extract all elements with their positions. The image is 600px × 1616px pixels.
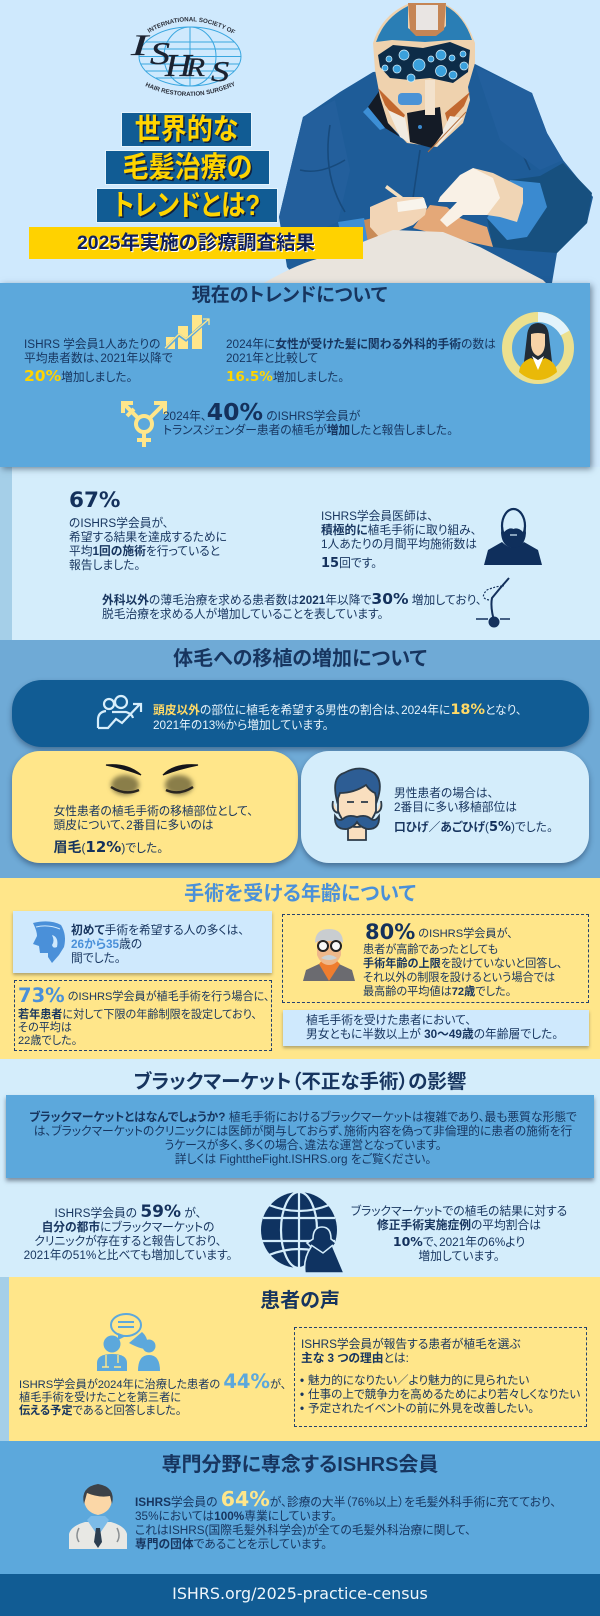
panel: patient voices [0,1277,600,1441]
text: patients per member: 20%増加しました。 [24,367,132,385]
text: beard 5 percent [394,786,553,835]
text: transgender patients: 2024年、40% のISHRS学会員が [163,398,360,426]
text: eyebrows 12 percent: 眉毛(12%)でした。 [54,838,163,856]
text: 80 percent: それ以外の制限を設けるという場合では [363,972,555,984]
text: female surgical procedures [226,337,496,385]
text: patients per member: ISHRS 学会員1人あたりの [24,338,160,351]
text: 80 percent [363,920,562,998]
text: 44 percent [19,1370,286,1417]
text: female surgical procedures: 16.5%増加しました。 [226,369,344,385]
subtitle band: 2025年実施の診療調査結果 [77,232,315,254]
title: line 1: 世界的な [135,112,238,146]
text: 26 to 35 years: 間でした。 [71,952,121,965]
list: three reasons: • [300,1374,304,1387]
text: 18 percent [153,702,522,732]
text: 26 to 35 years: 26から35歳の [71,938,142,951]
icon: closed eyes [106,764,198,798]
text: black market definition: うケースが多く、多くの場合、違法な運営となっています。 [165,1139,441,1152]
heading: dedicated ISHRS members: 専門分野に専念するISHRS会員 [162,1454,438,1476]
text: beard 5 percent: 男性患者の場合は、 [394,787,493,800]
text: 10 percent revision: 増加しています。 [418,1250,500,1263]
list: three reasons: 仕事の上で競争力を高めるためにより若々しくなりたい [308,1388,580,1401]
text: 67 percent one procedure: 希望する結果を達成するために [69,531,227,544]
text: 44 percent: 植毛手術を受けたことを第三者に [19,1392,181,1404]
text: 15 procedures per month: 積極的に植毛手術に取り組み、 [321,524,477,537]
text: black market definition: ブラックマーケットとはなんでしょうか? 植毛手術におけるブラックマーケットは複雑であり、最も悪質な形態で [29,1111,577,1124]
icon: hair follicle [476,577,510,628]
panel: dedicated members [0,1441,600,1574]
icon: woman in donut chart [502,312,574,384]
subtitle band [29,227,363,259]
text: 67 percent one procedure [69,488,227,572]
panel: body hair transplant [0,640,600,878]
callout: top three reasons [294,1327,587,1427]
text: 44 percent: ISHRS学会員が2024年に治療した患者の 44%が、 [19,1370,286,1393]
logo: ISHRS: H [164,48,194,83]
text: beard 5 percent: 2番目に多い移植部位は [394,801,517,814]
heading: current trends: 現在のトレンドについて [192,285,387,306]
title: line 2: 毛髪治療の [123,150,252,184]
logo: ISHRS: S [211,57,229,88]
callout: non-scalp transplants [12,680,589,747]
heading: body hair transplant: 体毛への移植の増加について [173,648,427,670]
icon: people with rising arrow [96,694,142,730]
heading: patient voices: 患者の声 [260,1290,340,1312]
text: 18 percent: 頭皮以外の部位に植毛を希望する男性の割合は、2024年に18%となり、 [153,702,522,718]
text: 64 percent: 専門の団体であることを示しています。 [135,1538,327,1551]
panel: female eyebrows [12,751,298,863]
icon: transgender symbol [121,401,167,447]
text: 80 percent: 最高齢の平均値は72歳でした。 [363,986,511,998]
icon: globe with hooded figure [261,1192,343,1272]
text: 10 percent revision: ブラックマーケットでの植毛の結果に対する [351,1205,567,1218]
icon: man with moustache [332,768,382,841]
text: 80 percent: 手術年齢の上限を設けていないと回答し、 [363,958,562,970]
footer: URL [0,1574,600,1616]
heading: age at surgery: 手術を受ける年齢について [184,883,416,905]
text: patients per member [24,338,173,385]
logo: ISHRS: HAIR RESTORATION SURGERY [145,82,234,96]
list: three reasons: 魅力的になりたい／より魅力的に見られたい [308,1374,529,1387]
panel: survey results background [0,467,600,640]
panel: current trends [0,283,590,467]
footer: URL: ISHRS.org/2025-practice-census [172,1584,428,1603]
text: 26 to 35 years: 初めて手術を希望する人の多くは、 [71,924,244,937]
text: eyebrows 12 percent [54,804,253,856]
panel: male beard [301,751,589,863]
logo: ISHRS: INTERNATIONAL SOCIETY OF [147,16,236,34]
text: 64 percent: 35%においては100%専業にしています。 [135,1510,337,1523]
text: eyebrows 12 percent: 女性患者の植毛手術の移植部位として、 [54,805,253,818]
callout: first time patients [13,911,272,973]
icon: doctor [69,1484,127,1549]
icon: doctor and patient speech bubbles [97,1313,160,1371]
text: 30 to 49: 植毛手術を受けた患者において、 [306,1014,471,1027]
callout: 73 percent lower age limit [14,980,272,1051]
callout: 30 to 49 years [283,1010,589,1046]
text: reasons intro: ISHRS学会員が報告する患者が植毛を選ぶ [301,1338,521,1351]
text: 67 percent one procedure: 平均1回の施術を行っていると [69,545,220,558]
text: 26 to 35 years [71,924,244,965]
text: non-surgical treatment: 外科以外の薄毛治療を求める患者数は2021年以降で30% 増加しており、 [102,590,482,608]
text: black market definition: 詳しくは FighttheFight.ISHRS.org をご覧ください。 [175,1153,431,1166]
icon: rising bar chart [164,315,210,349]
text: 67 percent one procedure: 67% [69,488,120,513]
text: 73 percent: 若年患者に対して下限の年齢制限を設定しており、 [18,1009,257,1021]
list: three reasons [300,1374,580,1415]
icon: bald bearded man [484,508,542,565]
text: 59 percent [24,1202,232,1262]
logo: ISHRS: S [150,36,170,71]
text: reasons intro: 主な 3 つの理由とは: [301,1352,409,1365]
logo: ISHRS: I [130,29,151,62]
text: 18 percent: 2021年の13%から増加しています。 [153,719,328,732]
text: 80 percent: 80% のISHRS学会員が、 [365,920,513,944]
text: 73 percent: その平均は [18,1022,72,1034]
list: three reasons: 予定されたイベントの前に外見を改善したい。 [308,1402,534,1415]
text: 30 to 49 [306,1014,558,1041]
text: 15 procedures per month: ISHRS学会員医師は、 [321,510,433,523]
title: line 3: トレンドとは? [114,188,260,222]
text: 64 percent: ISHRS学会員の 64%が、診療の大半（76%以上）を毛髪外科手術に充てており、 [135,1487,556,1511]
text: 59 percent: 自分の都市にブラックマーケットの [42,1221,214,1234]
text: 15 procedures per month: 1人あたりの月間平均施術数は [321,538,477,551]
list: three reasons: • [300,1388,304,1401]
text: 73 percent: 22歳でした。 [18,1035,77,1047]
text: 73 percent [18,984,270,1047]
logo: ISHRS: R [185,53,206,82]
text: 15 procedures per month: 15回です。 [321,556,377,571]
text: black market definition [29,1110,577,1166]
text: 30 to 49: 男女ともに半数以上が 30〜49歳の年齢層でした。 [306,1028,558,1041]
text: non-surgical treatment: 脱毛治療を求める人が増加していることを表しています。 [102,608,383,621]
text: non-surgical treatment [102,590,482,621]
text: female surgical procedures: 2021年と比較して [226,352,318,365]
text: black market definition: は、ブラックマーケットのクリニックには医師が関与しておらず、施術内容を偽って非倫理的に患者の施術を行 [34,1125,572,1138]
left strip [0,467,12,640]
list: three reasons: • [300,1402,304,1415]
illustration: surgeon performing hair surgery [264,3,593,283]
text: 73 percent: 73% のISHRS学会員が植毛手術を行う場合に、 [18,984,270,1007]
text: patients per member: 平均患者数は、2021年以降で [24,352,173,365]
text: beard 5 percent: 口ひげ／あごひげ(5%)でした。 [394,820,553,835]
callout: what is the black market [6,1095,594,1178]
text: female surgical procedures: 2024年に女性が受けた髪に関わる外科的手術の数は [226,338,496,351]
text: 59 percent: ISHRS学会員の 59% が、 [55,1202,201,1222]
text: 80 percent: 患者が高齢であったとしても [363,944,498,956]
text: 10 percent revision [351,1204,567,1263]
text: 64 percent [135,1487,556,1551]
text: 59 percent: 2021年の51%と比べても増加しています。 [24,1249,232,1262]
text: 15 procedures per month [321,510,477,571]
header background [0,0,600,283]
logo: ISHRS [130,16,242,96]
text: 10 percent revision: 10%で、2021年の6%より [393,1234,525,1249]
icon: head profile [33,921,65,963]
left strip [0,1277,9,1441]
text: 64 percent: これはISHRS(国際毛髪外科学会)が全ての毛髪外科治療に関して、 [135,1524,471,1537]
text: 10 percent revision: 修正手術実施症例の平均割合は [377,1219,541,1232]
panel: black market [0,1059,600,1277]
text: reasons intro [301,1338,521,1365]
text: transgender patients: トランスジェンダー患者の植毛が増加したと報告しました。 [163,424,453,437]
text: 67 percent one procedure: のISHRS学会員が、 [69,517,169,530]
heading: black market: ブラックマーケット（不正な手術）の影響 [134,1071,466,1093]
text: 59 percent: クリニックが存在すると報告しており、 [34,1235,222,1248]
icon: elderly man [303,929,355,981]
text: eyebrows 12 percent: 頭皮について、2番目に多いのは [54,819,213,832]
panel: age at surgery [0,878,600,1059]
text: 44 percent: 伝える予定であると回答しました。 [19,1405,181,1417]
text: 67 percent one procedure: 報告しました。 [69,559,140,572]
text: transgender patients [163,398,453,437]
callout: 80 percent no upper age limit [282,914,589,1003]
